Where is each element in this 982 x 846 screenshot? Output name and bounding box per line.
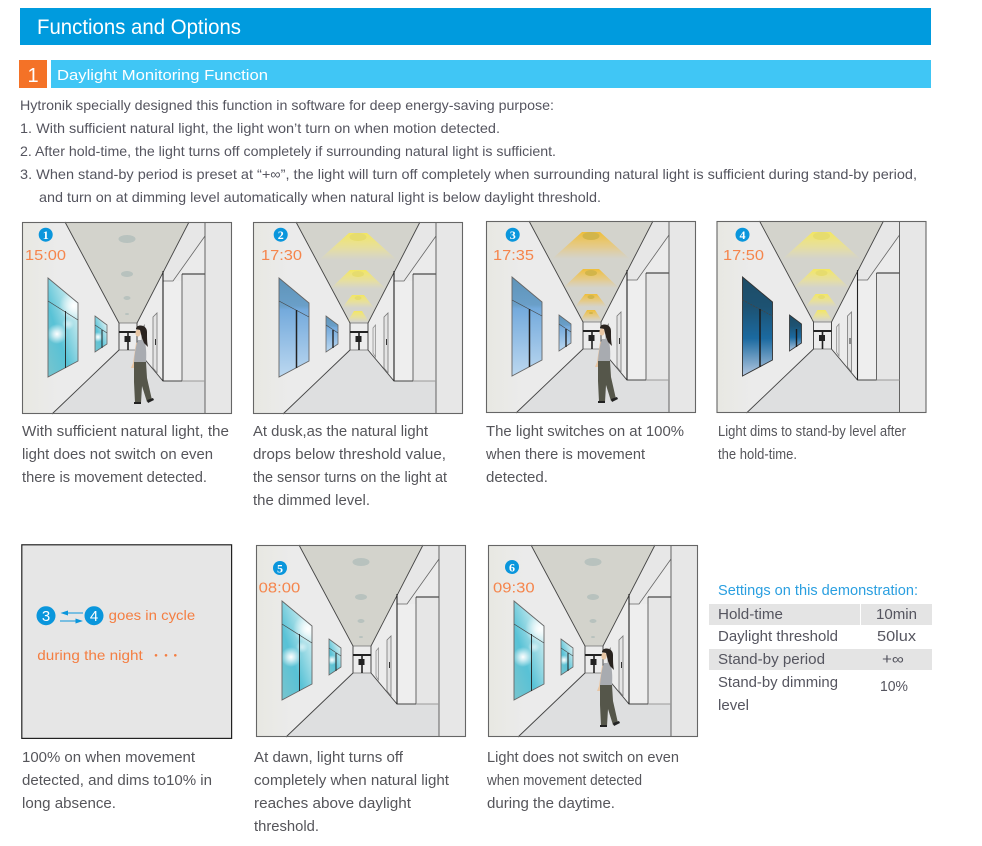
row: stand-by dimming level: 10% [880, 679, 908, 695]
caption panel 1 [22, 424, 229, 486]
caption panel 2: drops below threshold value, [253, 447, 446, 463]
cycle arrows [60, 610, 83, 624]
intro text block: 3. When stand-by period is preset at “+∞”, the light will turn off completely when surrounding natural light is sufficient during stand-by period, [20, 166, 917, 182]
panel 3: 17:35 [486, 221, 696, 413]
caption panel 2: the dimmed level. [253, 493, 370, 509]
time 17:30: 17:30 [261, 248, 302, 264]
intro text block: and turn on at dimming level automatically when natural light is below daylight threshold. [39, 189, 601, 205]
caption panel 4: Light dims to stand-by level after [718, 424, 906, 440]
step marker 4 [736, 228, 750, 242]
settings heading: Settings on this demonstration: [718, 582, 918, 599]
caption panel 2: At dusk,as the natural light [253, 424, 428, 440]
step marker 5: 5 [277, 561, 283, 575]
step marker 4: 4 [90, 608, 98, 625]
caption panel 2 [253, 424, 447, 509]
caption panel 5: threshold. [254, 819, 319, 835]
caption panel 4: the hold-time. [718, 447, 797, 463]
step marker 3 [36, 606, 56, 625]
section heading bar [51, 60, 931, 88]
row: stand-by dimming level: Stand-by dimming [718, 675, 838, 691]
intro text block: 2. After hold-time, the light turns off completely if surrounding natural light is sufficient. [20, 143, 556, 159]
night text: during the night [37, 647, 143, 663]
ellipsis dots [155, 654, 177, 657]
caption panel 6: when movement detected [486, 773, 642, 789]
panel 2: 17:30 [253, 222, 463, 414]
section number badge [19, 60, 47, 88]
row: stand-by dimming level [718, 675, 908, 714]
intro text block: Hytronik specially designed this function in software for deep energy-saving purpose: [20, 97, 554, 113]
caption panel 1: there is movement detected. [22, 470, 207, 486]
row: stand-by dimming level: level [718, 698, 749, 714]
caption panel 5 [254, 750, 449, 835]
caption panel 5: reaches above daylight [254, 796, 411, 812]
caption night cycle: detected, and dims to10% in [22, 773, 212, 789]
step marker 3: 3 [42, 608, 50, 625]
caption panel 3: The light switches on at 100% [486, 424, 684, 440]
panel 5: 08:00 [256, 545, 466, 737]
row: daylight threshold: 50lux [877, 629, 917, 645]
step marker 6 [505, 560, 519, 574]
caption panel 4 [718, 424, 906, 463]
section heading bar: Daylight Monitoring Function [57, 67, 268, 84]
row: daylight threshold: Daylight threshold [718, 629, 838, 645]
row: stand-by period: +∞ [882, 652, 904, 668]
step marker 1: 1 [43, 228, 49, 242]
caption night cycle [22, 750, 212, 812]
row: hold-time [709, 604, 932, 625]
caption panel 6: during the daytime. [487, 796, 615, 812]
caption night cycle: long absence. [22, 796, 116, 812]
step marker 5 [273, 561, 287, 575]
cycle text: goes in cycle [109, 607, 195, 623]
panel 1: 15:00 [22, 222, 232, 414]
row: stand-by period: Stand-by period [718, 652, 825, 668]
title banner [20, 8, 931, 45]
caption panel 6: Light does not switch on even [487, 750, 679, 766]
intro text block [20, 97, 917, 205]
caption panel 5: At dawn, light turns off [254, 750, 404, 766]
caption panel 5: completely when natural light [254, 773, 449, 789]
step marker 2: 2 [278, 228, 284, 242]
time 17:50: 17:50 [723, 248, 764, 264]
row: hold-time: Hold-time [718, 607, 783, 623]
caption panel 2: the sensor turns on the light at [253, 470, 447, 486]
time 09:30: 09:30 [493, 581, 535, 597]
caption panel 3: detected. [486, 470, 548, 486]
caption panel 1: With sufficient natural light, the [22, 424, 229, 440]
row: daylight threshold [718, 629, 917, 645]
row: stand-by period [709, 649, 932, 670]
step marker 2 [274, 228, 288, 242]
time 17:35: 17:35 [493, 248, 534, 264]
caption panel 3 [485, 424, 684, 486]
step marker 3: 3 [510, 228, 516, 242]
caption panel 3: when there is movement [485, 447, 645, 463]
panel 4: 17:50 [716, 221, 926, 413]
step marker 6: 6 [509, 560, 515, 574]
time 15:00: 15:00 [25, 248, 66, 264]
caption panel 6 [486, 750, 679, 812]
title text: Functions and Options [37, 16, 241, 39]
step marker 3 [506, 228, 520, 242]
settings table [709, 582, 932, 714]
step marker 1 [39, 228, 53, 242]
step marker 4 [84, 606, 104, 625]
section heading: daylight monitoring function [19, 60, 931, 88]
caption night cycle: 100% on when movement [22, 750, 195, 766]
panel: night cycle note [22, 545, 232, 738]
row: hold-time: 10min [876, 607, 917, 623]
time 08:00: 08:00 [259, 581, 300, 597]
step marker 4: 4 [740, 228, 746, 242]
section number badge: 1 [27, 65, 39, 87]
panel 6: 09:30 [488, 545, 698, 737]
intro text block: 1. With sufficient natural light, the light won’t turn on when motion detected. [20, 120, 500, 136]
caption panel 1: light does not switch on even [22, 447, 213, 463]
